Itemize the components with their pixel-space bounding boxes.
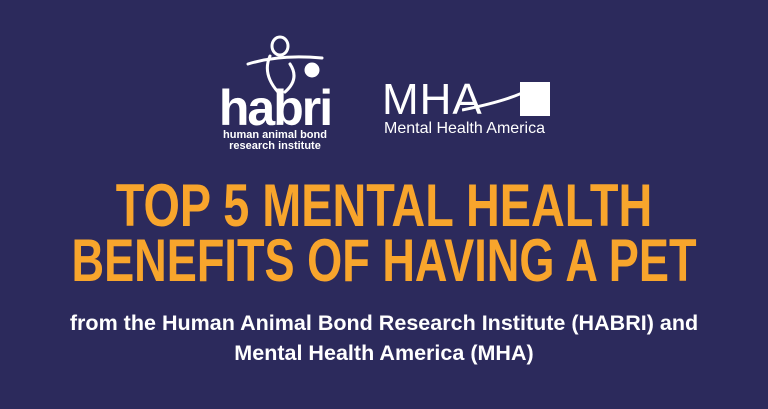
text: MHA: MHA bbox=[382, 75, 483, 124]
text: human animal bond research institute bbox=[223, 129, 327, 152]
text: human animal bond research institute: human animal bond bbox=[223, 129, 327, 141]
title line 1: TOP 5 MENTAL HEALTH bbox=[116, 172, 652, 239]
text: Mental Health America: Mental Health America bbox=[384, 120, 545, 137]
title line 2: BENEFITS OF HAVING A PET bbox=[71, 227, 697, 294]
text: habri: habri bbox=[219, 80, 331, 136]
subtitle: from the Human Animal Bond Research Institute (HABRI) and bbox=[70, 312, 698, 335]
title bbox=[71, 172, 697, 294]
icon: dog and person line art bbox=[246, 36, 324, 94]
logo: MHA bbox=[382, 75, 550, 137]
logo: habri bbox=[219, 36, 331, 152]
text: human animal bond research institute: research institute bbox=[229, 140, 321, 152]
subtitle: Mental Health America (MHA) bbox=[234, 342, 534, 365]
icon: swoosh bbox=[462, 82, 550, 116]
subtitle bbox=[70, 312, 698, 365]
